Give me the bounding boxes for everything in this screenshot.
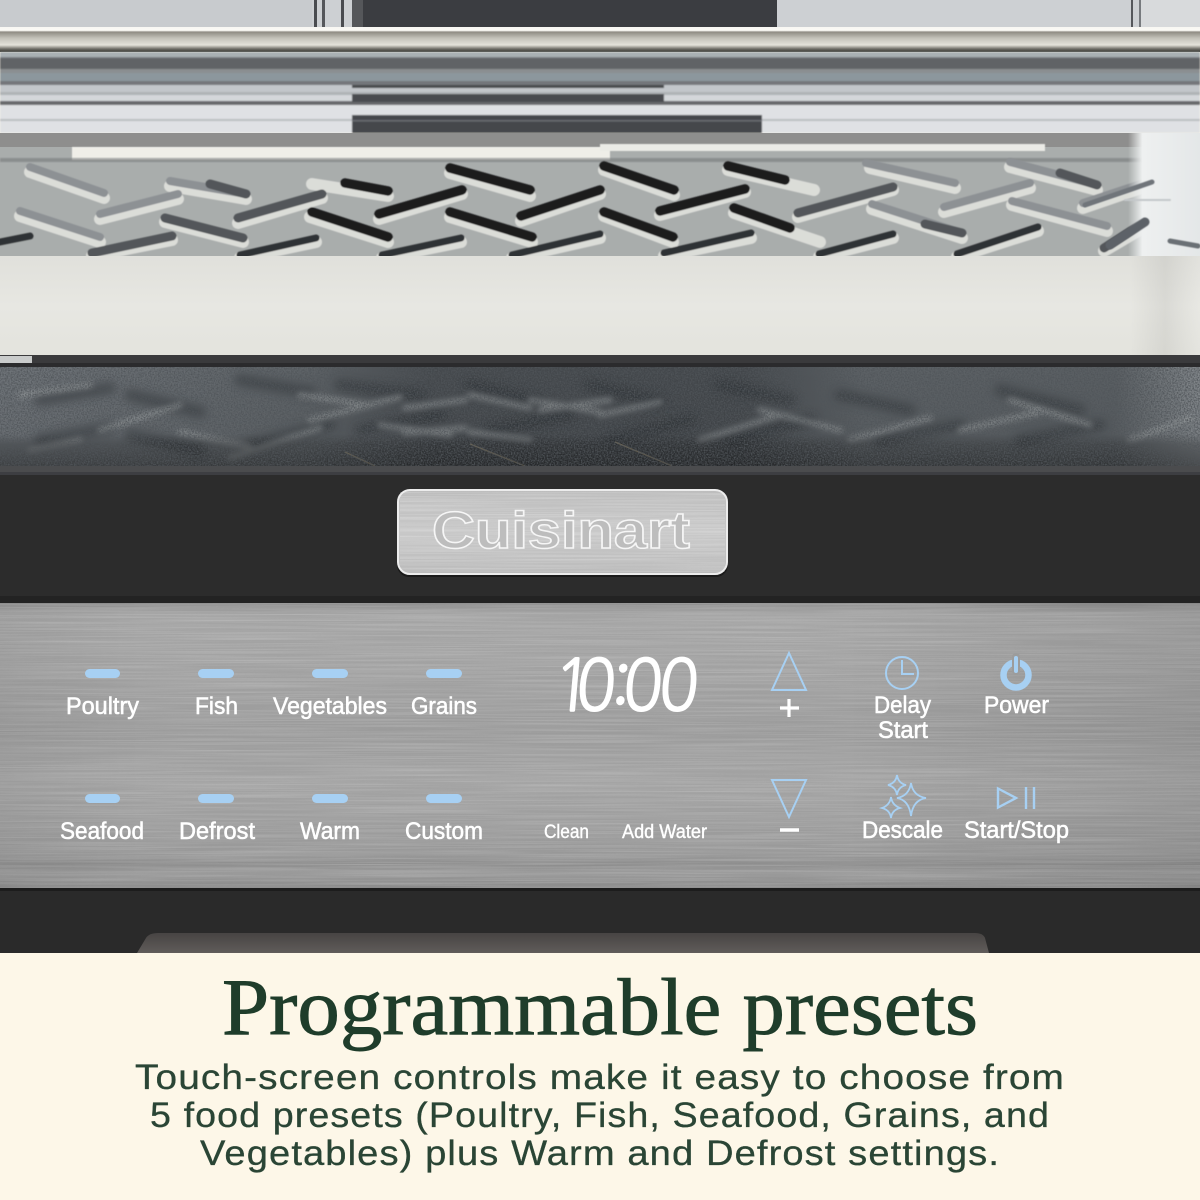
panel: black base lower with tray	[0, 888, 1200, 953]
digital clock display: 10:00	[549, 650, 702, 721]
preset buttons: top row: Grains	[411, 693, 477, 720]
status labels: clean and add water: Add Water	[622, 821, 707, 843]
tread plate raised ribs	[0, 162, 1150, 258]
icon: sparkles	[882, 775, 926, 818]
power button	[984, 657, 1049, 719]
preset buttons: top row	[66, 669, 477, 720]
preset buttons: bottom row: Defrost	[179, 818, 255, 845]
delay start button: Delay	[874, 692, 932, 719]
logo text: Cuisinart	[432, 502, 690, 560]
panel: lower tray under glass	[0, 355, 1200, 470]
preset buttons: top row: Poultry	[66, 693, 140, 720]
dark herringbone blotches	[40, 380, 1100, 450]
heading: Programmable presets	[222, 962, 978, 1052]
preset buttons: bottom row: Custom	[405, 818, 483, 845]
panel: cream tray band	[0, 256, 1200, 356]
descale button	[862, 775, 943, 844]
Cuisinart badge	[397, 490, 728, 577]
body text: Vegetables) plus Warm and Defrost settings.	[200, 1134, 1000, 1173]
panel: ribbed glass lid edge	[0, 52, 1200, 133]
body text: Touch-screen controls make it easy to choose from	[135, 1058, 1065, 1097]
panel: caption background	[0, 953, 1200, 1200]
body text: 5 food presets (Poultry, Fish, Seafood, Grains, and	[150, 1096, 1050, 1135]
delay start button	[874, 657, 932, 744]
right edge reflections	[1085, 182, 1198, 246]
icon: clock	[886, 657, 918, 689]
power button: Power	[984, 692, 1049, 719]
status labels: clean and add water	[544, 821, 707, 843]
start/stop button: Start/Stop	[964, 817, 1069, 844]
descale button: Descale	[862, 817, 943, 844]
panel: brushed steel control panel	[0, 603, 1200, 890]
icon: down arrow with minus	[772, 780, 806, 830]
start/stop button	[964, 787, 1069, 844]
preset buttons: bottom row: Seafood	[60, 818, 144, 845]
preset buttons: top row: Fish	[195, 693, 238, 720]
body text	[135, 1058, 1065, 1173]
status labels: clean and add water: Clean	[544, 821, 589, 843]
blurred reflected ribs	[20, 385, 1190, 458]
preset buttons: bottom row	[60, 794, 483, 845]
panel: black base upper	[0, 466, 1200, 603]
delay start button: Start	[878, 717, 928, 744]
icon: power	[1004, 657, 1028, 688]
panel: steamer glass top	[0, 0, 1200, 28]
panel: metal rim	[0, 27, 1200, 52]
thin bright creases	[345, 442, 672, 466]
icon: up arrow with plus	[772, 653, 806, 717]
preset buttons: top row: Vegetables	[273, 693, 387, 720]
preset buttons: bottom row: Warm	[300, 818, 360, 845]
icon: play pause	[998, 787, 1034, 809]
panel: steam tray tread plate	[0, 133, 1200, 258]
